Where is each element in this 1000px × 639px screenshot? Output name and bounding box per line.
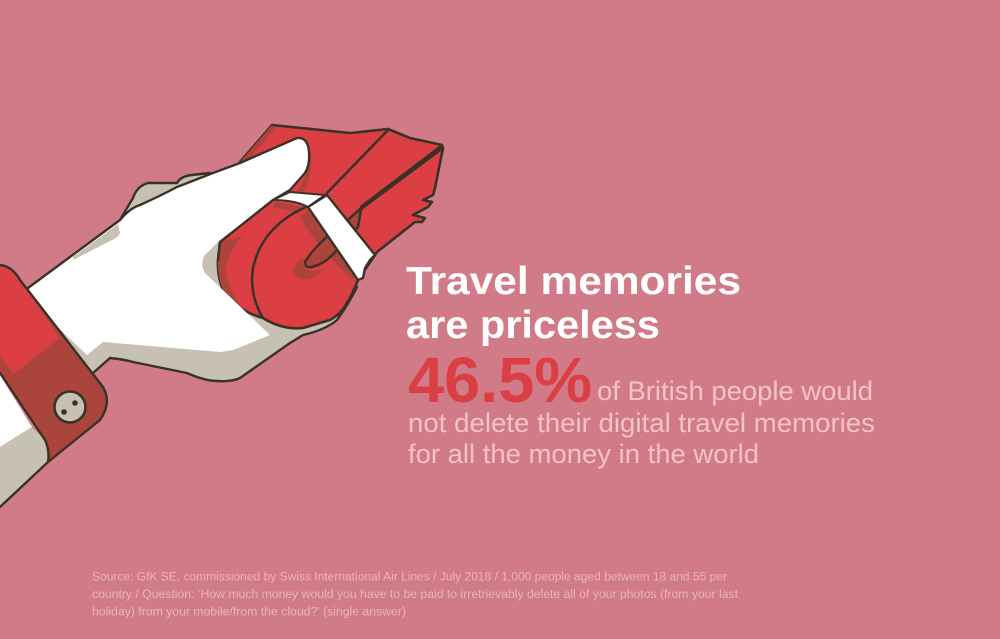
hand white	[0, 138, 309, 447]
illustration: hand holding red travel case	[0, 125, 443, 507]
hand upper outline	[28, 138, 309, 288]
knuckle shadows	[120, 173, 213, 225]
case slit interior	[306, 207, 360, 267]
statistic: 46.5%: 46.5%	[408, 344, 592, 416]
cuff button	[54, 392, 86, 422]
cuff outline	[0, 265, 107, 462]
thick case seam	[362, 147, 441, 207]
cuff highlight	[0, 265, 60, 373]
title: are priceless	[406, 304, 660, 347]
hand shadow	[62, 240, 357, 381]
hand lower outline	[93, 287, 357, 381]
statistic description: for all the money in the world	[408, 439, 759, 469]
source note	[92, 572, 739, 618]
case shading	[218, 125, 358, 312]
sleeve edge	[0, 462, 48, 507]
source note: holiday) from your mobile/from the cloud?’ (single answer)	[92, 606, 406, 618]
statistic description: of British people would	[597, 376, 873, 406]
cuff	[0, 265, 107, 462]
cuff band dark	[0, 265, 107, 462]
source note: country / Question: ‘How much money would you have to be paid to irretrievably delete all of your photos (from your last	[92, 589, 739, 601]
case edges	[252, 130, 443, 318]
source note: Source: GfK SE, commissioned by Swiss International Air Lines / July 2018 / 1,000 people aged between 18 and 55 per	[92, 572, 727, 584]
case body	[218, 125, 443, 328]
back strap	[273, 192, 325, 207]
title: Travel memories	[406, 260, 741, 303]
title	[406, 260, 741, 347]
statistic description	[408, 376, 875, 469]
statistic description: not delete their digital travel memories	[408, 408, 875, 438]
wrist shadow sliver	[73, 224, 120, 260]
front strap	[308, 195, 375, 280]
sleeve shadow	[0, 427, 48, 507]
